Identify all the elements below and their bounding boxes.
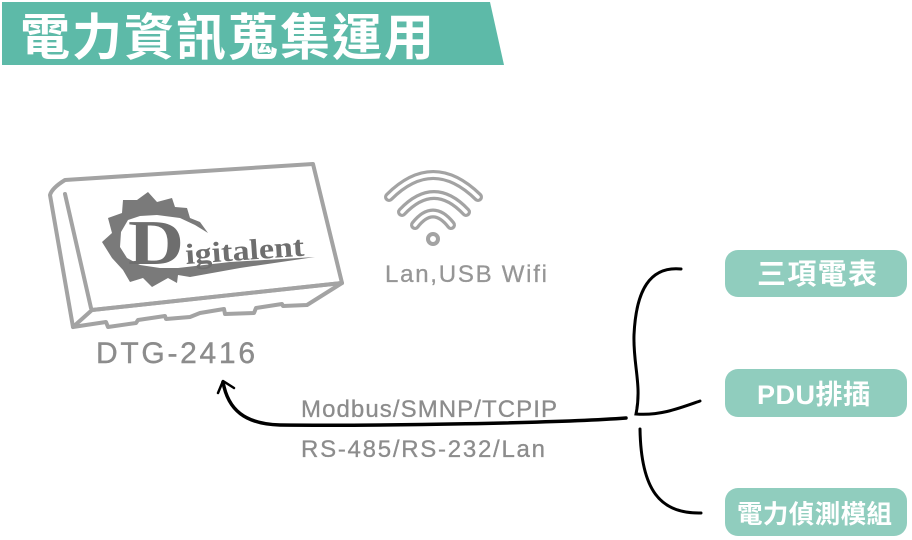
icon: wifi bbox=[389, 175, 478, 244]
title banner bbox=[2, 2, 504, 66]
pill: PDU排插 bbox=[725, 369, 907, 417]
pill: 電力偵測模組: 電力偵測模組 bbox=[737, 501, 892, 529]
protocol label top: Modbus/SMNP/TCPIP bbox=[301, 396, 557, 423]
pill: 三項電表 bbox=[725, 250, 907, 297]
device outline bbox=[50, 164, 342, 327]
protocol label bottom: RS-485/RS-232/Lan bbox=[301, 436, 545, 463]
arrow to device bbox=[218, 381, 626, 425]
device label: DTG-2416 bbox=[96, 337, 255, 370]
logo: Digitalent bbox=[102, 192, 315, 287]
pill: PDU排插: PDU排插 bbox=[757, 380, 870, 410]
logo wordmark: D bbox=[128, 207, 184, 278]
device: DTG-2416 bbox=[50, 164, 342, 370]
logo sunburst ring bbox=[102, 192, 315, 287]
wifi label: Lan,USB Wifi bbox=[385, 261, 547, 288]
pill: 三項電表: 三項電表 bbox=[757, 258, 877, 291]
logo: Digitalent: igitalent bbox=[184, 231, 306, 271]
pill: 電力偵測模組 bbox=[725, 488, 907, 536]
title text: 電力資訊蒐集運用 bbox=[20, 10, 434, 66]
bracket connector bbox=[634, 269, 701, 513]
